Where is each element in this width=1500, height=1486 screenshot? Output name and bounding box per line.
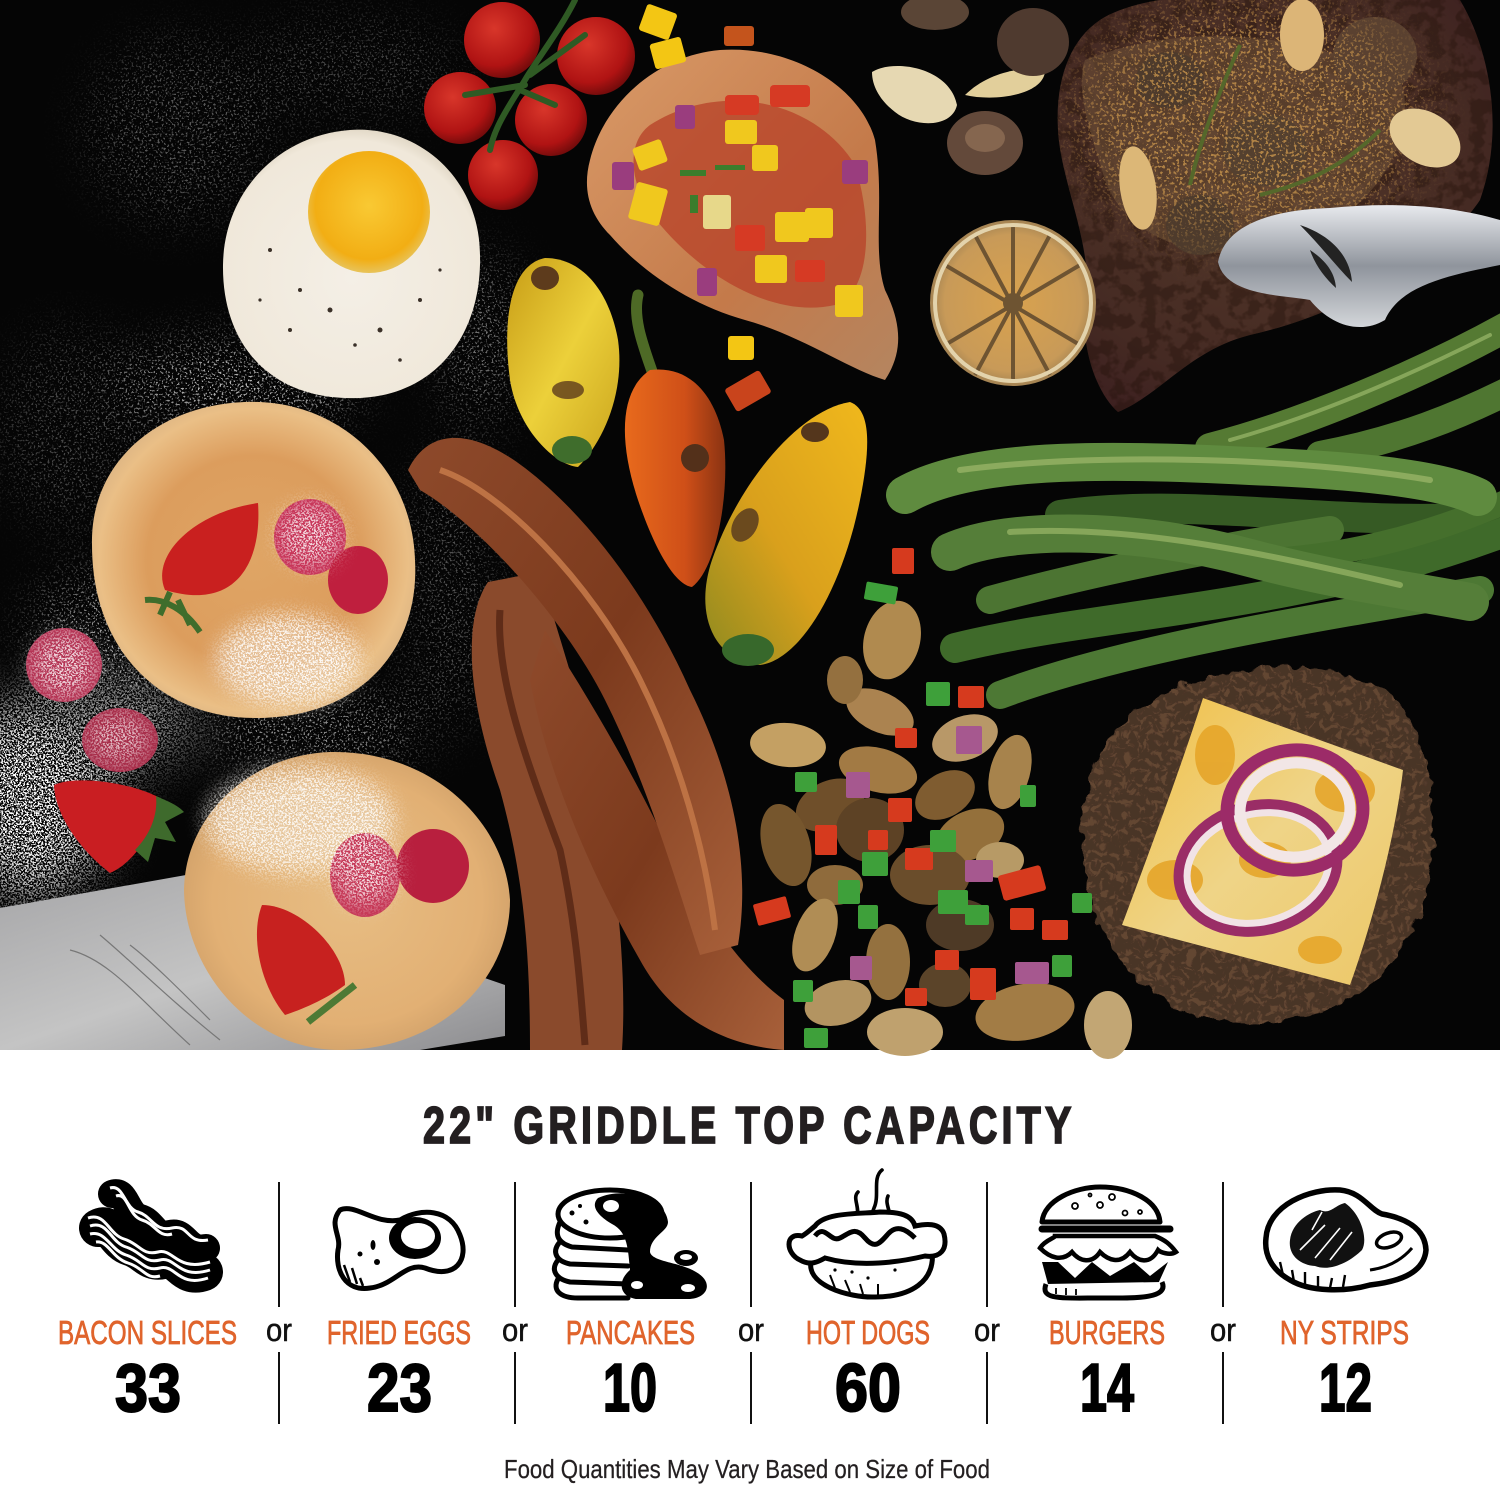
sugar dusting over food [17, 490, 412, 917]
number: 12: 12 [1319, 1350, 1372, 1426]
or: or [974, 1312, 1000, 1348]
cherry tomatoes on the vine [424, 0, 635, 210]
or: or [502, 1312, 528, 1348]
or: or [1210, 1312, 1236, 1348]
label: bacon slices: BACON SLICES [58, 1314, 237, 1351]
grilled chicken breast with salsa [587, 50, 898, 380]
icon: fried egg [335, 1209, 463, 1288]
label: burgers: BURGERS [1049, 1314, 1165, 1351]
column: pancakes [554, 1190, 707, 1426]
or: or [738, 1312, 764, 1348]
roasted garlic bulb [930, 220, 1096, 386]
number: 10: 10 [603, 1350, 657, 1426]
number: 60: 60 [835, 1350, 901, 1426]
asparagus spears [905, 325, 1500, 695]
icon: hot dog with steam [789, 1170, 945, 1297]
mango pieces [638, 3, 754, 360]
metal tongs [1218, 205, 1500, 327]
column: NY strips [1266, 1190, 1426, 1426]
roasted potatoes with diced peppers [748, 548, 1132, 1059]
label: fried eggs: FRIED EGGS [327, 1314, 471, 1351]
fried egg [223, 130, 480, 398]
label: NY strips: NY STRIPS [1280, 1314, 1409, 1351]
column: burgers [1040, 1187, 1176, 1426]
garlic cloves and mushrooms [872, 0, 1069, 175]
or: or [266, 1312, 292, 1348]
pancake with strawberry and raspberries [92, 402, 415, 718]
number: 33: 33 [115, 1350, 181, 1426]
column separators [279, 1182, 1223, 1424]
icon: burger [1040, 1187, 1176, 1298]
spatula [0, 875, 505, 1050]
photo: griddle with food [0, 0, 1500, 1059]
title: 22" GRIDDLE TOP CAPACITY [423, 1096, 1076, 1154]
column: hot dogs [789, 1170, 945, 1426]
number: 23: 23 [367, 1350, 432, 1426]
label: pancakes: PANCAKES [566, 1314, 695, 1351]
label: hot dogs: HOT DOGS [806, 1314, 930, 1351]
number: 14: 14 [1080, 1350, 1134, 1426]
icon: bacon [88, 1188, 210, 1280]
column: bacon slices [58, 1188, 237, 1426]
bacon strips [408, 438, 784, 1050]
loose berries on the griddle [26, 628, 184, 873]
grilled mini peppers [507, 258, 867, 666]
footnote: Food Quantities May Vary Based on Size of Food [504, 1454, 990, 1484]
cheeseburger patty with cheese and onion [1078, 664, 1437, 1025]
icon: NY strip steak [1266, 1190, 1426, 1290]
icon: pancake stack with syrup [554, 1190, 707, 1299]
steak [1040, 0, 1500, 430]
pancake with strawberry and raspberries, lower [184, 752, 510, 1050]
column: fried eggs [327, 1209, 471, 1426]
